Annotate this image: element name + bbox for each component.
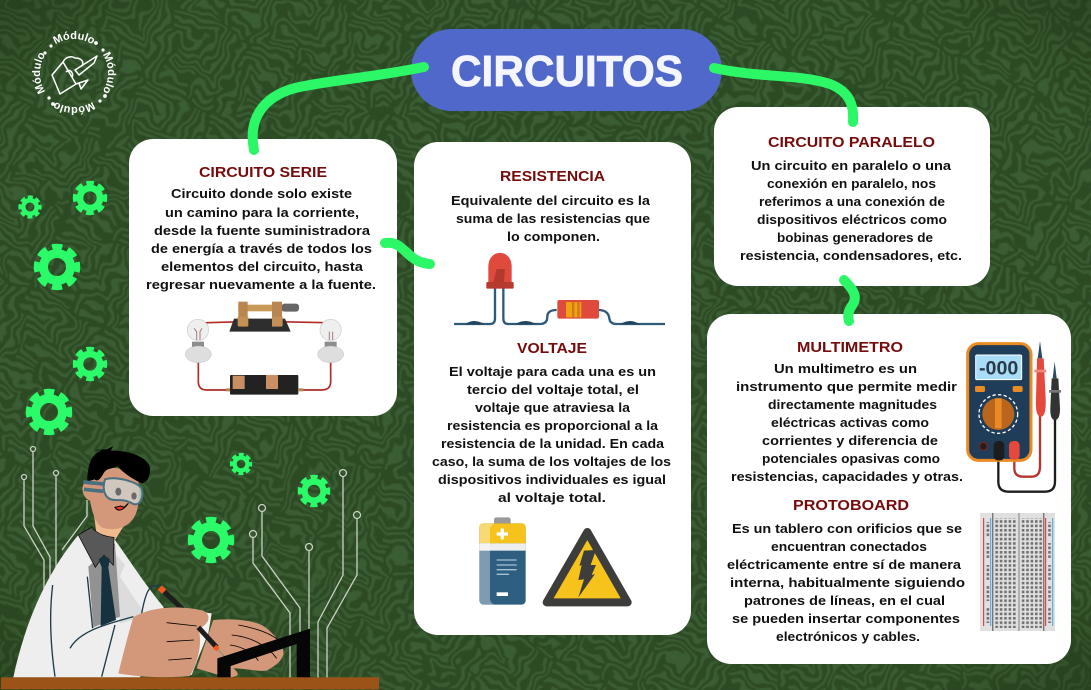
illustration: LED and resistor [454,253,665,324]
back hand [197,619,284,677]
hair [87,446,150,483]
face [88,468,139,529]
logo: Módulo: Módulo [52,31,94,44]
text block: protoboard: interna, habitualmente siguiendo [730,575,965,590]
text block: multimetro: instrumento que permite medir [736,379,957,394]
illustration: series circuit [185,302,344,395]
text block: circuito serie: desde la fuente suministradora [154,223,371,238]
gears [20,183,328,560]
text block: voltaje [432,364,671,505]
text block: circuito paralelo: conexión en paralelo, nos [767,176,936,191]
mouth [115,503,128,510]
text block: voltaje: al voltaje total. [498,490,606,505]
text block: voltaje: El voltaje para cada una es un [449,364,656,379]
stand [217,629,310,677]
goggles [83,482,103,491]
heading: circuito serie: CIRCUITO SERIE [199,165,327,181]
text block: resistencia: suma de las resistencias que [456,211,650,226]
text block: circuito serie: regresar nuevamente a la fuente. [146,277,376,292]
circuit traces [22,446,360,678]
text block: circuito paralelo: bobinas generadores de [777,230,933,245]
connector: title to serie [253,67,424,150]
panel: circuito paralelo [714,107,990,286]
panel: resistencia y voltaje [414,142,691,635]
shirt and tie [88,543,120,627]
icon: high voltage warning [547,532,628,602]
text block: voltaje: resistencia de la unidad. En cada [441,436,665,451]
text block: multimetro: potenciales opasivas como [762,451,940,466]
text block: protoboard: se pueden insertar componentes [732,611,960,626]
logo: Módulo: Módulo [54,102,96,115]
table [1,677,379,689]
text block: circuito paralelo: resistencia, condensadores, etc. [740,248,962,263]
neck [93,510,132,540]
heading: multimetro: MULTIMETRO [797,340,903,356]
heading: protoboard: PROTOBOARD [793,498,909,514]
soldering pen cable [142,586,162,613]
paper [180,610,212,675]
text block: circuito paralelo: referimos a una conexión de [759,194,945,209]
pen body [162,590,182,608]
coat [13,535,167,677]
text block: circuito paralelo: dispositivos eléctricos como [757,212,947,227]
text block: circuito serie [146,186,376,292]
illustration: technician soldering [1,446,379,689]
text block: circuito paralelo [740,158,962,263]
text block: protoboard: encuentran conectados [771,539,927,554]
text block: circuito serie: de energía a través de todos los [151,241,372,256]
text block: circuito serie: elementos del circuito, hasta [161,259,364,274]
logo: Módulo: Módulo [32,53,45,94]
text block: multimetro: Un multimetro es un [774,361,917,376]
text block: resistencia: lo componen. [507,229,600,244]
panel: multimetro y protoboard [707,314,1071,664]
text block: protoboard: eléctricamente entre sí de manera [727,557,962,572]
connector: serie to resistencia [385,243,430,264]
text block: resistencia: Equivalente del circuito es la [451,193,651,208]
text block: resistencia [451,193,651,244]
heading: voltaje: VOLTAJE [517,341,587,357]
logo: Módulo [32,31,116,115]
text block: circuito serie: Circuito donde solo existe [171,186,352,201]
heading: resistencia: RESISTENCIA [500,169,606,185]
text block: voltaje: caso, la suma de los voltajes de los [432,454,671,469]
icon: battery [479,517,526,605]
panel: circuito serie [129,139,397,416]
front hand [118,607,209,677]
text block: voltaje: dispositivos individuales es igual [438,472,666,487]
icon: protoboard [980,513,1055,631]
text block: circuito serie: un camino para la corriente, [165,205,359,220]
text block: multimetro [731,361,963,484]
icon: multimeter [968,341,1061,492]
text block: voltaje: voltaje que atraviesa la [475,400,631,415]
connector: title to paralelo [714,68,853,122]
text block: protoboard: electrónicos y cables. [776,629,920,644]
text block: multimetro: eléctricas activas como [771,415,929,430]
text block: voltaje: tercio del voltaje total, el [467,382,639,397]
text block: protoboard: patrones de líneas, en el cual [744,593,945,608]
icon: multimeter: -000 [979,358,1018,379]
logo: Módulo: Módulo [103,52,116,93]
text block: multimetro: directamente magnitudes [768,397,937,412]
title: circuitos: CIRCUITOS [451,47,683,96]
heading: circuito paralelo: CIRCUITO PARALELO [768,135,935,151]
text block: circuito paralelo: Un circuito en paralelo o una [751,158,952,173]
text block: protoboard [727,521,965,644]
connector: paralelo to multimetro [844,280,855,321]
text block: protoboard: Es un tablero con orificios que se [732,521,962,536]
text block: voltaje: resistencia es proporcional a la [447,418,659,433]
title: circuitos [411,29,722,111]
text block: multimetro: corrientes y diferencia de [762,433,938,448]
text block: multimetro: resistencias, capacidades y otras. [731,469,963,484]
